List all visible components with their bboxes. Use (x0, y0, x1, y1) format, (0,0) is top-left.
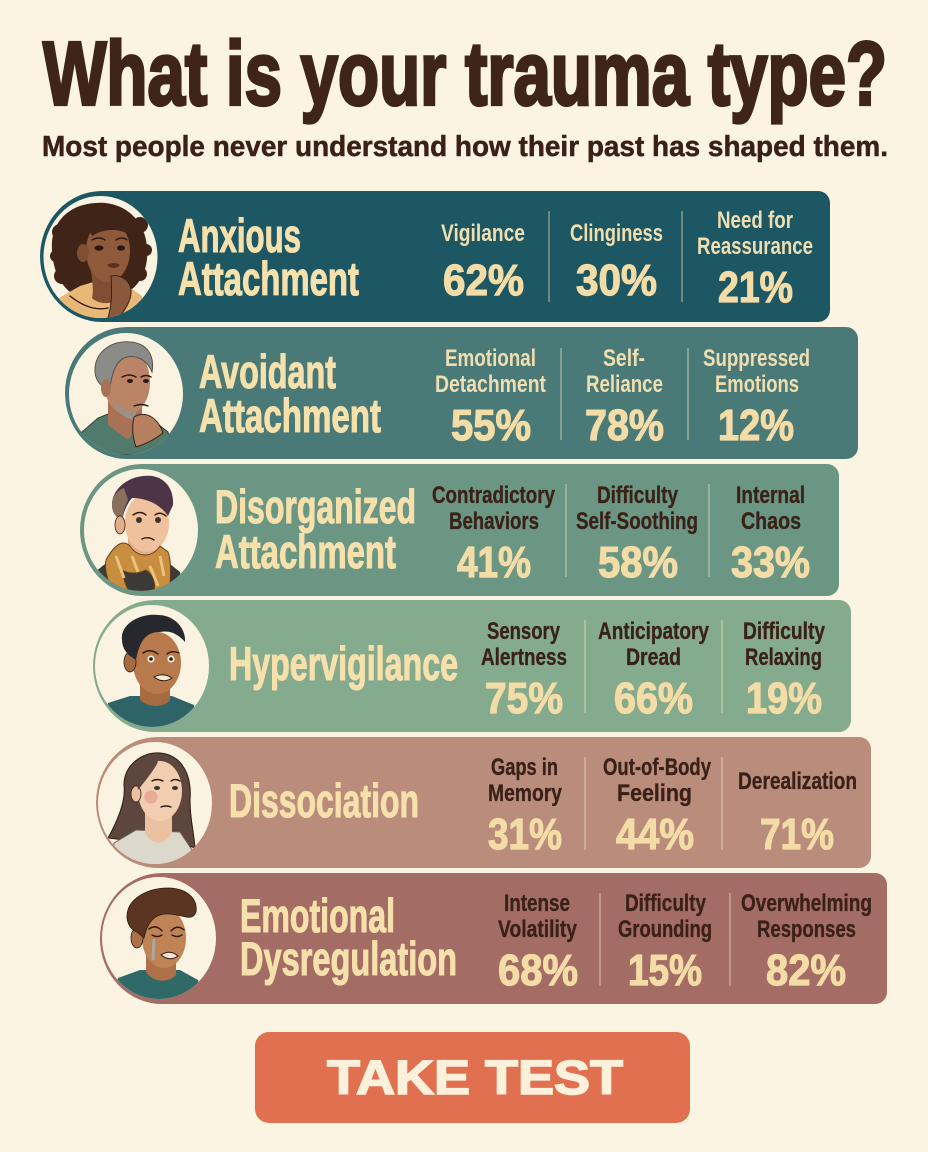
stat: intense volatility: Volatility (498, 916, 578, 943)
stat: internal chaos: 33% (731, 538, 810, 587)
stat: derealization: 71% (760, 810, 834, 859)
stat: self-reliance: Reliance (586, 371, 663, 398)
stat: gaps in memory: Gaps in (491, 754, 558, 781)
heading: Avoidant (199, 345, 336, 398)
stat: gaps in memory: Memory (488, 780, 563, 807)
stat: contradictory behaviors: Contradictory (432, 482, 556, 509)
heading: Disorganized (215, 480, 416, 533)
stat: vigilance: 62% (443, 256, 524, 305)
stat: out-of-body feeling: 44% (616, 810, 694, 859)
portrait: long-haired woman (98, 742, 212, 866)
portrait: startled man (95, 605, 209, 730)
portrait: person with scarf (84, 469, 198, 595)
stat: internal chaos (731, 482, 810, 587)
stat: emotional detachment: 55% (451, 401, 531, 450)
stat: suppressed emotions: 12% (718, 401, 794, 450)
stat: overwhelming responses: Overwhelming (741, 890, 872, 917)
stat: difficulty self-soothing: Self-Soothing (576, 508, 698, 535)
stat: difficulty self-soothing (576, 482, 698, 587)
stat: emotional detachment: Emotional (445, 345, 536, 372)
button: take test (255, 1032, 690, 1123)
stat: intense volatility: Intense (504, 890, 570, 917)
stat: out-of-body feeling (603, 754, 711, 859)
stat: sensory alertness: Sensory (487, 618, 560, 645)
stat: self-reliance (585, 345, 664, 450)
heading: Hypervigilance (229, 637, 458, 690)
panel: dissociation (96, 737, 871, 868)
stat: difficulty relaxing: Relaxing (745, 644, 822, 671)
stat: need for reassurance: Reassurance (697, 233, 813, 260)
heading (199, 345, 381, 442)
stat: self-reliance: Self- (603, 345, 645, 372)
stat: internal chaos: Internal (736, 482, 805, 509)
stat: anticipatory dread (598, 618, 710, 723)
stat: difficulty grounding: 15% (628, 946, 702, 995)
heading (178, 209, 359, 305)
stat: sensory alertness (481, 618, 567, 723)
heading (240, 889, 457, 985)
heading: Attachment (199, 389, 381, 442)
stat: difficulty self-soothing: Difficulty (597, 482, 679, 509)
portrait: anxious woman (44, 196, 158, 320)
heading: Dissociation (229, 774, 419, 827)
stat: self-reliance: 78% (585, 401, 664, 450)
stat: derealization: Derealization (738, 768, 857, 795)
stat: internal chaos: Chaos (741, 508, 801, 535)
stat: difficulty relaxing: Difficulty (743, 618, 826, 645)
stat: difficulty relaxing (743, 618, 826, 723)
stat: vigilance: Vigilance (441, 220, 525, 247)
stat: difficulty grounding (618, 890, 712, 995)
stat: need for reassurance (697, 207, 813, 312)
stat: contradictory behaviors: Behaviors (449, 508, 539, 535)
heading (215, 480, 416, 578)
panel: anxious attachment (40, 191, 830, 322)
stat: need for reassurance: 21% (718, 263, 793, 312)
stat: derealization (738, 768, 857, 859)
heading: Attachment (215, 525, 396, 578)
stat: out-of-body feeling: Feeling (617, 780, 692, 807)
heading: Dysregulation (240, 932, 457, 985)
portrait: older man (69, 333, 183, 455)
stat: difficulty grounding: Grounding (618, 916, 712, 943)
stat: intense volatility (498, 890, 578, 995)
stat: need for reassurance: Need for (717, 207, 793, 234)
panel: disorganized attachment (80, 464, 839, 596)
stat: suppressed emotions: Emotions (715, 371, 799, 398)
stat: anticipatory dread: Dread (626, 644, 681, 671)
stat: contradictory behaviors (432, 482, 556, 587)
stat: overwhelming responses (741, 890, 872, 995)
portrait: crying man (102, 877, 216, 1002)
stat: anticipatory dread: Anticipatory (598, 618, 710, 645)
stat: emotional detachment: Detachment (435, 371, 546, 398)
stat: clinginess (570, 220, 663, 305)
stat: suppressed emotions (703, 345, 810, 450)
heading: Attachment (178, 252, 359, 305)
subtitle: Most people never understand how their past has shaped them. (42, 131, 888, 163)
stat: intense volatility: 68% (498, 946, 578, 995)
stat: difficulty relaxing: 19% (746, 674, 822, 723)
button: take test: TAKE TEST (327, 1052, 623, 1105)
stat: emotional detachment (435, 345, 546, 450)
panel: hypervigilance (93, 600, 851, 732)
heading: Anxious (178, 209, 301, 262)
stat: clinginess: Clinginess (570, 220, 663, 247)
stat: sensory alertness: Alertness (481, 644, 567, 671)
stat: anticipatory dread: 66% (614, 674, 693, 723)
heading: Emotional (240, 889, 395, 942)
stat: sensory alertness: 75% (485, 674, 563, 723)
stat: overwhelming responses: 82% (766, 946, 846, 995)
stat: difficulty grounding: Difficulty (625, 890, 707, 917)
stat: contradictory behaviors: 41% (457, 538, 531, 587)
stat: gaps in memory: 31% (488, 810, 562, 859)
stat: clinginess: 30% (576, 256, 657, 305)
stat: vigilance (441, 220, 525, 305)
stat: suppressed emotions: Suppressed (703, 345, 810, 372)
stat: out-of-body feeling: Out-of-Body (603, 754, 711, 781)
stat: gaps in memory (488, 754, 563, 859)
stat: overwhelming responses: Responses (757, 916, 856, 943)
panel: emotional dysregulation (100, 873, 887, 1004)
stat: difficulty self-soothing: 58% (598, 538, 678, 587)
panel: avoidant attachment (65, 327, 858, 459)
